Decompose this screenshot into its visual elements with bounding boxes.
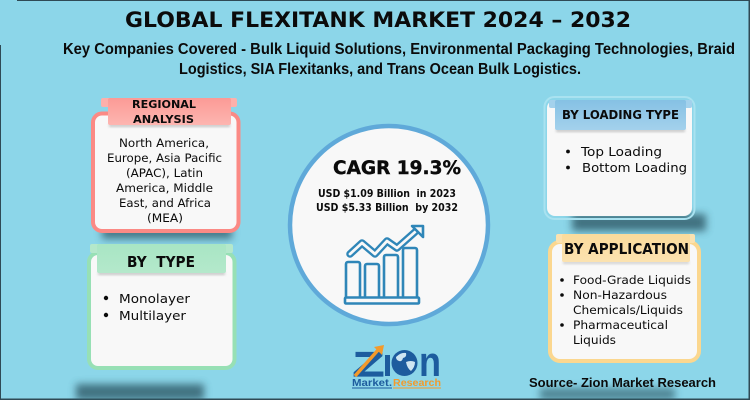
market size figures: USD $1.09 Billion in 2023 <box>318 188 456 200</box>
regional analysis text: Europe, Asia Pacific <box>107 151 222 165</box>
ribbon: by type heading <box>90 244 233 275</box>
market size figures: USD $5.33 Billion by 2032 <box>316 202 458 214</box>
ribbon: by type heading: BY TYPE <box>127 253 195 271</box>
subtitle: key companies covered: Logistics, SIA Flexitanks, and Trans Ocean Bulk Logistics. <box>179 61 581 78</box>
by application list: Liquids <box>573 333 616 347</box>
title: GLOBAL FLEXITANK MARKET 2024 – 2032 <box>125 8 631 32</box>
market size figures <box>316 188 458 214</box>
regional analysis text: North America, <box>119 136 209 150</box>
subtitle: key companies covered <box>63 41 735 78</box>
by loading type list <box>566 144 687 175</box>
ribbon: by application heading: BY APPLICATION <box>564 240 689 258</box>
ribbon: regional analysis heading <box>101 98 237 127</box>
by application list: Food-Grade Liquids <box>573 273 691 287</box>
by loading type list: Top Loading <box>580 144 662 159</box>
logo: Zion Market Research <box>352 338 441 389</box>
ribbon: by loading type heading <box>549 100 692 132</box>
by application list <box>560 273 691 347</box>
logo: Zion Market Research: Market. <box>352 378 392 389</box>
ribbon: by application heading <box>556 234 695 264</box>
regional analysis text: (MEA) <box>147 211 183 225</box>
source note: Source- Zion Market Research <box>529 375 716 390</box>
by application list: Pharmaceutical <box>573 318 668 332</box>
regional analysis text: East, and Africa <box>119 196 211 210</box>
regional analysis text: America, Middle <box>116 181 213 195</box>
logo: Zion Market Research: n <box>419 338 441 385</box>
by type list <box>104 291 191 323</box>
panel: by application <box>550 234 699 361</box>
panel: regional analysis <box>93 98 238 231</box>
panel: by loading type <box>544 97 694 219</box>
logo: Zion Market Research: Research <box>393 378 441 389</box>
by type list: Multilayer <box>119 308 187 323</box>
panel: CAGR circle <box>290 126 488 324</box>
CAGR value: CAGR 19.3% <box>333 157 461 179</box>
by application list: Non-Hazardous <box>573 288 667 302</box>
ribbon: regional analysis heading: ANALYSIS <box>133 113 194 126</box>
by application list: Chemicals/Liquids <box>573 303 683 317</box>
logo: Zion Market Research: Z <box>353 346 384 384</box>
ribbon: regional analysis heading: REGIONAL <box>132 98 196 111</box>
icon: growth bar chart <box>345 226 423 304</box>
panel: by type <box>89 244 234 368</box>
by loading type list: Bottom Loading <box>582 160 687 175</box>
ribbon: by loading type heading: BY LOADING TYPE <box>562 107 679 122</box>
regional analysis text: (APAC), Latin <box>126 166 203 180</box>
regional analysis text <box>107 136 222 225</box>
by type list: Monolayer <box>119 291 191 306</box>
